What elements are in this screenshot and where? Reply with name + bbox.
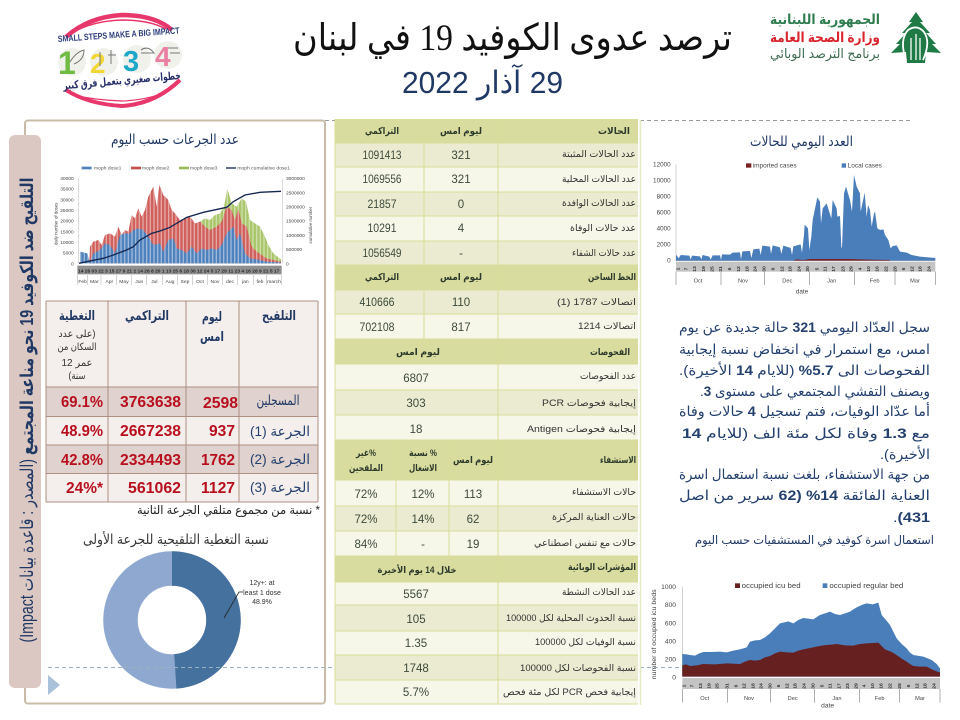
logo: ministry of public health: الجمهورية اللبنانية: [770, 11, 880, 28]
paragraph: daily summary: ويصنف التفشي المجتمعي على مستوى 3.: [700, 383, 930, 400]
date band: [77, 266, 282, 274]
chart: occupied hospital beds: [651, 581, 940, 710]
section: hospitalization: -: [421, 539, 425, 551]
date band: 18: [788, 266, 794, 272]
dose 3 row: [66, 479, 310, 497]
date band: 6: [727, 267, 733, 270]
y axis labels: 200: [665, 656, 676, 663]
stacked areas: [80, 185, 281, 263]
date band: 10: [870, 683, 876, 689]
date band: 18: [793, 683, 799, 689]
registered row: المسجلين: [256, 392, 300, 409]
month labels: Mar: [910, 278, 920, 284]
month labels: Jan: [827, 278, 836, 284]
date band: 19: [701, 266, 707, 272]
section: cases: -: [459, 248, 463, 260]
date band: 17: [831, 266, 837, 272]
legend: occupied regular bed: [829, 581, 903, 590]
donut title: نسبة التغطية التلقيحية للجرعة الأولى: [83, 531, 269, 548]
month labels: May: [119, 279, 129, 285]
chart title: daily doses: عدد الجرعات حسب اليوم: [111, 131, 239, 148]
section: tests: إيجابية فحوصات PCR: [542, 398, 636, 409]
legend: occupied icu bed: [742, 581, 801, 590]
section: hotline: التراكمي: [365, 272, 399, 283]
y axis labels: 4000: [657, 226, 671, 233]
panel: vaccination: [25, 120, 325, 704]
coverage note: [58, 329, 96, 382]
coverage note: (على عدد: [58, 329, 96, 340]
date band: 6: [906, 684, 912, 687]
section: hospitalization: 62: [467, 514, 479, 526]
section: hospitalization: 12%: [411, 489, 435, 501]
registered row: [61, 392, 300, 412]
table: vaccination counts: [46, 301, 318, 502]
section: cases: عدد الحالات المحلية: [562, 174, 636, 185]
date band: 24: [932, 683, 938, 689]
date band: 18: [750, 683, 756, 689]
month labels: [700, 696, 925, 702]
section: cases: عدد حالات الشفاء: [572, 248, 636, 259]
dose 1 row: الجرعة (1): [250, 423, 310, 440]
section: hotline: [360, 272, 636, 334]
date band: 6: [901, 267, 907, 270]
coverage note: السكان من: [58, 342, 96, 353]
section: cases: 1069556: [362, 174, 402, 186]
date band: 30: [767, 683, 773, 689]
right axis labels: 1000000: [286, 233, 305, 239]
dose 1 row: 48.9%: [61, 423, 103, 440]
section: cases: التراكمي: [365, 126, 399, 137]
section: hospitalization: الملقحين: [349, 463, 383, 474]
table header: التراكمي: [125, 308, 169, 323]
date band: 25: [715, 683, 721, 689]
registered row: 69.1%: [61, 394, 103, 411]
date band: 12: [784, 683, 790, 689]
paragraph: daily summary: من جهة الاستشفاء، بلغت نسبة استعمال اسرة: [679, 466, 930, 483]
left axis labels: 25000: [60, 208, 74, 214]
title: ترصد عدوى الكوفيد 19 في لبنان: [293, 18, 732, 59]
date band: 1: [675, 267, 681, 270]
chart: daily vaccine doses: cumulative number: [308, 206, 313, 243]
y axis labels: 6000: [657, 210, 671, 217]
section: epidemiological indicators: خلال 14 يوم الأخيرة: [378, 564, 456, 576]
month labels: dec: [226, 279, 235, 285]
dose 2 row: 2334493: [120, 452, 181, 469]
section: cases: عدد الحالات الوافدة: [562, 198, 636, 209]
date band: 22: [883, 266, 889, 272]
dose 3 row: الجرعة (3): [250, 479, 310, 496]
section: hotline: الخط الساخن: [588, 272, 636, 283]
section: hospitalization: ليوم امس: [453, 455, 493, 466]
section: hospitalization: [349, 448, 636, 551]
date band: 29: [853, 683, 859, 689]
section: hospitalization: 72%: [354, 514, 378, 526]
chart: daily vaccine doses: [54, 166, 313, 285]
date band: 6: [770, 267, 776, 270]
date band: 6: [776, 684, 782, 687]
month labels: [694, 278, 920, 284]
dose 2 row: 1762: [201, 452, 235, 469]
dose 3 row: 1127: [201, 480, 235, 497]
section: epidemiological indicators: إيجابية فحص PCR لكل مئة فحص: [503, 687, 636, 698]
date band: [675, 262, 935, 272]
month labels: Jul: [151, 279, 158, 285]
date subtitle: 29 آذار 2022: [402, 63, 563, 101]
month labels: Mar: [90, 279, 99, 285]
section: cases: ليوم امس: [440, 126, 482, 137]
logo: small steps make a big impact: [57, 15, 182, 106]
section: hospitalization: حالات مع تنفس اصطناعي: [534, 538, 636, 549]
date band: 5: [819, 684, 825, 687]
section: cases: عدد الحالات المثبتة: [562, 149, 636, 160]
y axis labels: 600: [665, 620, 676, 627]
legend: [735, 581, 903, 590]
decorative dashes: [48, 666, 680, 668]
date band: 18: [923, 683, 929, 689]
section: hospitalization: الاستشفاء: [600, 455, 636, 466]
legend: Local cases: [848, 163, 883, 170]
arrow marker: [48, 675, 60, 695]
date band: 11: [828, 683, 834, 689]
local cases area: [676, 175, 935, 261]
dose 1 row: 937: [209, 423, 235, 440]
date band: 16: [878, 683, 884, 689]
y axis labels: 400: [665, 638, 676, 645]
month labels: Feb: [875, 696, 885, 702]
dose 3 row: 561062: [128, 480, 181, 497]
date band: 5: [814, 267, 820, 270]
table header: [59, 308, 296, 344]
month labels: Jan: [832, 696, 842, 702]
logo: small steps make a big impact: 4: [155, 41, 171, 72]
axis titles: daily number of doses: [54, 203, 59, 245]
month labels: Aug: [166, 279, 175, 285]
date band: 24: [797, 266, 803, 272]
right axis labels: 3000000: [286, 176, 305, 182]
left axis labels: 20000: [60, 219, 74, 225]
table header: التلقيح: [262, 308, 296, 323]
paragraph: daily summary: سجل العدّاد اليومي 321 حالة جديدة عن يوم: [679, 319, 930, 336]
section: cases: 1056549: [362, 248, 402, 260]
logo: ministry of public health: [770, 11, 941, 63]
chart legend: moph cumulative dose1: [237, 166, 290, 172]
date band: 30: [810, 683, 816, 689]
left axis labels: 0: [71, 261, 74, 267]
paragraph: daily summary: الأخيرة).: [880, 445, 930, 463]
section: epidemiological indicators: 5.7%: [403, 687, 429, 699]
sidebar: vaccination title: [9, 135, 41, 688]
left axis labels: 10000: [60, 240, 74, 246]
date band: 12: [914, 683, 920, 689]
month labels: Nov: [211, 279, 220, 285]
month labels: Dec: [788, 696, 798, 702]
section: hospitalization: 14%: [411, 514, 435, 526]
y axis labels: [661, 584, 676, 681]
section: tests: ليوم امس: [396, 347, 440, 358]
date band: 31: [724, 683, 730, 689]
logo: ministry of public health: برنامج الترصد الوبائي: [770, 46, 880, 62]
cumulative line: [79, 191, 281, 263]
donut label: 48.9%: [252, 599, 272, 606]
date band: 30: [805, 266, 811, 272]
month labels: Oct: [694, 278, 703, 284]
date band: 10: [866, 266, 872, 272]
month labels: Apr: [105, 279, 114, 285]
y axis labels: 1000: [661, 584, 676, 591]
date band: 7: [684, 267, 690, 270]
y axis labels: 10000: [653, 178, 671, 185]
section: cases: 10291: [368, 223, 396, 235]
section: cases: 4: [458, 223, 465, 235]
paragraph: daily summary: مع 1.3 وفاة لكل مئة الف (للايام 14: [682, 425, 930, 442]
chart title: daily cases: العدد اليومي للحالات: [750, 133, 853, 150]
y axis labels: 12000: [653, 162, 671, 169]
left axis labels: 35000: [60, 187, 74, 193]
section: epidemiological indicators: 105: [406, 614, 426, 626]
date band: 25: [709, 266, 715, 272]
date band: 24: [927, 266, 933, 272]
y axis labels: 0: [672, 674, 676, 681]
logo: small steps make a big impact: 1: [58, 45, 76, 81]
left axis labels: 30000: [60, 197, 74, 203]
month labels: Nov: [744, 696, 754, 702]
month labels: feb: [257, 279, 264, 285]
section: epidemiological indicators: نسبة الحدوث المحلية لكل 100000: [506, 613, 636, 624]
date band: 13: [692, 266, 698, 272]
paragraph: daily summary: 431).: [893, 509, 930, 525]
footnote: * نسبة من مجموع متلقي الجرعة الثانية: [137, 503, 320, 518]
section: cases: عدد حالات الوفاة: [570, 223, 636, 234]
date band: 18: [744, 266, 750, 272]
section: cases: 21857: [368, 199, 396, 211]
section: epidemiological indicators: نسبة الفحوصات لكل 100000: [520, 663, 636, 674]
date band: 14 26 03 22 3 15 27 9 21 2 14 26 8 20 1 13 25 6 18 30 12 24 5 17 29 11 23 4 16 28 9 21 5 17: [78, 268, 280, 274]
date band: [682, 678, 940, 689]
date band: 6: [733, 684, 739, 687]
date band: 31: [718, 266, 724, 272]
imported cases area: [793, 259, 890, 261]
month labels: Mar: [915, 696, 925, 702]
section: hospitalization: 72%: [354, 489, 378, 501]
date band: 28: [892, 266, 898, 272]
y axis labels: [653, 162, 671, 265]
icu beds area: [682, 643, 940, 677]
donut label: [224, 580, 281, 618]
date band: 11: [823, 266, 829, 272]
chart legend: moph dose3: [190, 166, 218, 172]
month labels: Feb: [870, 278, 880, 284]
left axis labels: 5000: [63, 251, 74, 257]
date band: 12: [909, 266, 915, 272]
date band: 18: [918, 266, 924, 272]
section: hospitalization: حالات الاستشفاء: [572, 487, 636, 498]
section: hotline: اتصالات 1787 (1): [557, 297, 636, 308]
donut label: 12y+: at: [249, 580, 275, 587]
date band: 29: [848, 266, 854, 272]
section: cases: 0: [458, 199, 464, 211]
date band: 24: [753, 266, 759, 272]
date band: 7: [689, 684, 695, 687]
chart title: hospital beds: استعمال اسرة كوفيد في المستشفيات حسب اليوم: [695, 533, 934, 548]
right axis labels: 0: [286, 261, 289, 267]
month labels: march: [267, 279, 281, 285]
date band: 19: [706, 683, 712, 689]
date band: 1: [682, 684, 688, 687]
y axis title: number of occupied icu beds: [651, 589, 658, 679]
section: tests: 6807: [403, 373, 429, 385]
right axis labels: 1500000: [286, 219, 305, 225]
section: tests: 303: [406, 398, 426, 410]
month labels: Nov: [738, 278, 748, 284]
chart legend: [82, 166, 290, 172]
date band: 24: [759, 683, 765, 689]
logo: ministry of public health: وزارة الصحة العامة: [770, 29, 880, 46]
dose 1 row: [61, 423, 310, 440]
section: hotline: 702108: [360, 322, 394, 334]
section: cases: 1091413: [362, 150, 402, 162]
date band: 13: [698, 683, 704, 689]
right axis labels: 500000: [286, 247, 302, 253]
paragraph: daily summary: أما عدّاد الوفيات، فتم تسجيل 4 حالات وفاة: [679, 402, 930, 420]
section: hospitalization: 113: [464, 489, 482, 501]
date band: 23: [845, 683, 851, 689]
section: hospitalization: 84%: [354, 539, 378, 551]
section: hotline: اتصالات 1214: [578, 321, 636, 332]
date band: 30: [762, 266, 768, 272]
registered row: 2598: [203, 395, 238, 412]
dose 1 row: 2667238: [120, 423, 181, 440]
table header: امس: [200, 329, 224, 344]
section: tests: 18: [410, 424, 422, 436]
paragraph: daily summary: امس، مع استمرار في انخفاض نسبة إيجابية: [679, 341, 930, 358]
right axis labels: 2500000: [286, 190, 305, 196]
coverage note: سنة): [68, 371, 86, 382]
section: hospitalization: الاشغال: [409, 463, 437, 474]
section: hotline: ليوم امس: [440, 272, 482, 283]
axis title: date: [796, 288, 809, 295]
right axis labels: 2000000: [286, 205, 305, 211]
section: epidemiological indicators: المؤشرات الوبائية: [568, 562, 636, 573]
table row backgrounds: [335, 119, 638, 704]
month labels: Feb: [78, 279, 87, 285]
section: epidemiological indicators: 5567: [403, 589, 429, 601]
left axis labels: 40000: [60, 176, 74, 182]
date band: 12: [742, 683, 748, 689]
month labels: Oct: [700, 696, 709, 702]
section: epidemiological indicators: عدد الحالات النشطة: [562, 587, 636, 598]
dose 2 row: الجرعة (2): [250, 451, 310, 468]
section: tests: إيجابية فحوصات Antigen: [527, 424, 636, 435]
section: hospitalization: %غير: [355, 448, 376, 459]
dose 3 row: 24%*: [66, 480, 104, 497]
paragraph: daily summary: [679, 319, 930, 525]
dose 2 row: 42.8%: [61, 452, 103, 469]
date band: 23: [840, 266, 846, 272]
paragraph: daily summary: العناية الفائقة 14% (62 سرير من اصل: [679, 487, 930, 504]
right axis labels: [286, 176, 305, 267]
donut chart: [120, 568, 281, 672]
table: epidemiological data: [335, 119, 638, 704]
y axis labels: 2000: [657, 242, 671, 249]
date band: 24: [802, 683, 808, 689]
axis title: date: [821, 703, 834, 710]
logo: small steps make a big impact: 3: [123, 46, 139, 78]
section: epidemiological indicators: 1748: [403, 663, 429, 675]
section: epidemiological indicators: نسبة الوفيات لكل 100000: [535, 637, 636, 648]
chart: daily cases: [653, 162, 935, 295]
date band: 22: [888, 683, 894, 689]
y axis labels: 0: [667, 258, 671, 265]
table header: ليوم: [202, 309, 222, 325]
month labels: [78, 279, 281, 285]
logo: small steps make a big impact: خطوات صغيري بتعمل فرق كبير: [62, 70, 181, 92]
month labels: jan: [241, 279, 249, 285]
section: cases: الحالات: [598, 126, 630, 137]
dose 2 row: [61, 451, 310, 469]
section: cases: 321: [451, 174, 471, 186]
date band: 17: [837, 683, 843, 689]
section: tests: [396, 347, 636, 436]
y axis labels: 8000: [657, 194, 671, 201]
month labels: Dec: [782, 278, 793, 284]
month labels: Jun: [135, 279, 144, 285]
legend: imported cases: [753, 163, 797, 170]
section: epidemiological indicators: 1.35: [405, 638, 427, 650]
coverage note: عمر 12: [62, 358, 92, 369]
table header: التغطية: [59, 308, 95, 323]
month labels: Oct: [196, 279, 204, 285]
section: hotline: 110: [452, 297, 470, 309]
section: hospitalization: 19: [467, 539, 479, 551]
section: tests: عدد الفحوصات: [580, 371, 636, 382]
chart legend: moph dose2: [142, 166, 170, 172]
logo: small steps make a big impact: SMALL STEPS MAKE A BIG IMPACT: [57, 25, 180, 44]
sidebar: vaccination title: التلقيح ضد الكوفيد 19 نحو مناعة المجتمع (المصدر : قاعدة بيانات Impact): [17, 178, 38, 642]
legend: [746, 163, 883, 170]
section: hotline: 410666: [360, 297, 394, 309]
date band: 28: [897, 683, 903, 689]
section: epidemiological indicators: [378, 562, 636, 699]
donut label: least 1 dose: [243, 590, 281, 597]
logo: small steps make a big impact: 2: [90, 48, 106, 79]
registered row: 3763638: [120, 394, 181, 411]
left axis labels: [60, 176, 74, 267]
month labels: Sep: [181, 279, 190, 285]
regular beds area: [682, 603, 940, 677]
chart legend: moph dose1: [94, 166, 122, 172]
section: hotline: 817: [451, 322, 471, 334]
left axis labels: 15000: [60, 229, 74, 235]
section: cases: [362, 126, 636, 260]
section: cases: 321: [451, 150, 471, 162]
date band: 4: [862, 684, 868, 687]
section: hospitalization: حالات العناية المركزة: [552, 512, 636, 523]
section: tests: الفحوصات: [590, 347, 630, 358]
date band: 12: [779, 266, 785, 272]
date band: 12: [736, 266, 742, 272]
date band: 16: [874, 266, 880, 272]
paragraph: daily summary: الفحوصات الى 5.7% (للايام 14 الأخيرة).: [679, 361, 930, 379]
date band: 4: [858, 267, 864, 270]
y axis labels: 800: [665, 602, 676, 609]
section: hospitalization: % نسبة: [409, 448, 437, 459]
